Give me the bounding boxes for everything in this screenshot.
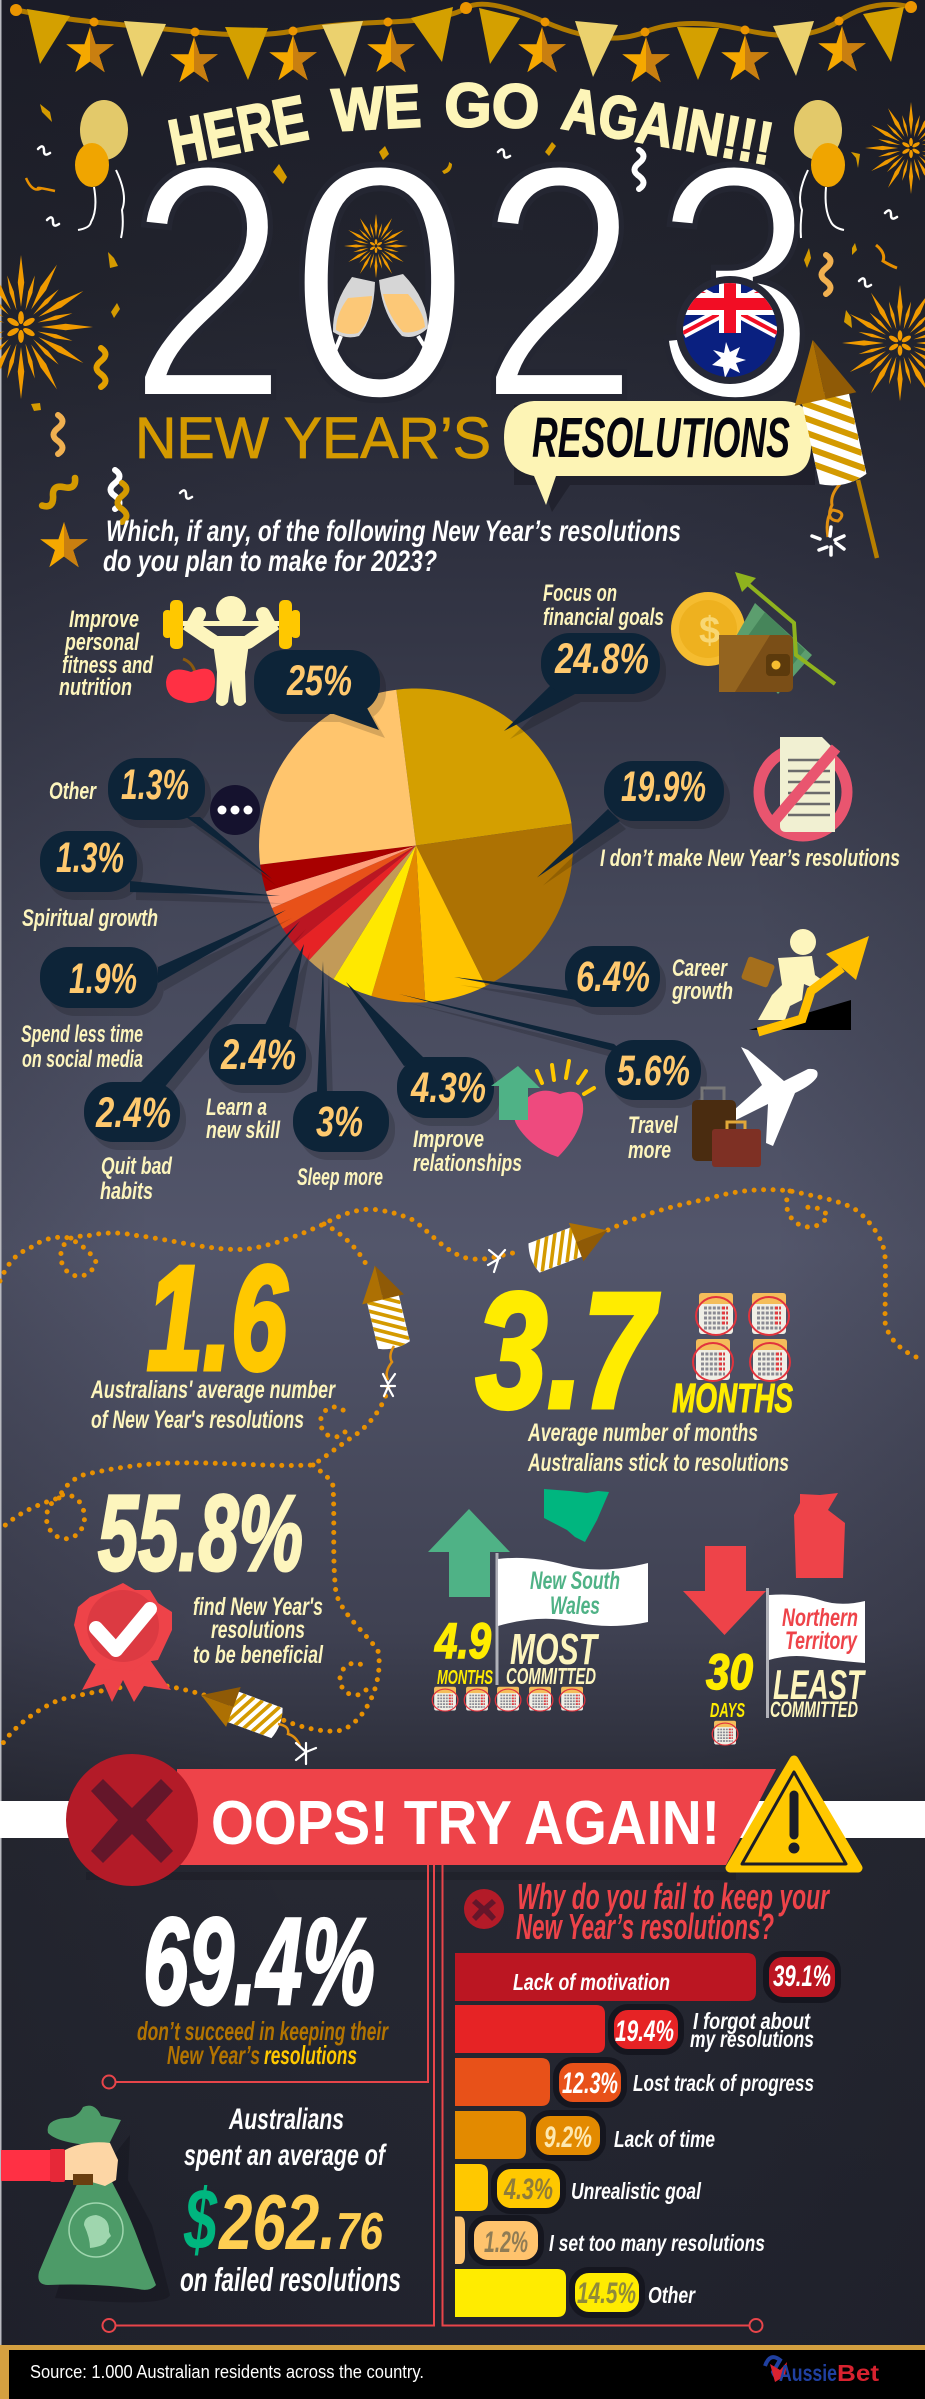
headline: here we go again: AGAIN!!! <box>558 75 778 178</box>
stat: 55.8% <box>74 1472 324 1702</box>
callout: 25% fitness: fitness and <box>62 652 154 679</box>
panel: most committed (NSW) <box>428 1489 648 1711</box>
bar: other <box>455 2269 696 2317</box>
stat: 3.7 months <box>476 1259 793 1477</box>
confetti <box>26 104 897 522</box>
string beads <box>10 1 917 36</box>
stat: money spent <box>180 2103 401 2298</box>
stat: 3.7 months: Average number of months <box>527 1419 758 1447</box>
icon: one calendar <box>712 1721 738 1745</box>
icon: fitness figure <box>163 596 300 706</box>
callout: 6.4% career growth: Career <box>672 955 728 982</box>
flag: Wales <box>550 1592 600 1620</box>
stat: 69.4%: 69.4% <box>143 1894 375 2031</box>
subtitle: new year's: NEW YEAR’S <box>135 406 491 471</box>
icon: climbing figure <box>741 929 869 1032</box>
stat: 1.6 <box>90 1236 336 1434</box>
stars <box>66 26 866 82</box>
stat: 1.6: Australians' average number <box>90 1376 336 1404</box>
bunting <box>10 1 917 82</box>
icon: star <box>40 522 88 567</box>
pie chart <box>259 688 573 1002</box>
pennants <box>27 7 904 80</box>
stat: 69.4%: don’t succeed in keeping their <box>137 2016 389 2046</box>
headline: 2023 <box>128 96 815 468</box>
icon: big rocket <box>782 333 877 558</box>
bar: lack of motivation <box>455 1953 838 2001</box>
callout: 2.4% learn a new skill: 2.4% <box>220 1031 296 1079</box>
question heading: do you plan to make for 2023? <box>103 545 437 578</box>
bar: too many: I set too many resolutions <box>549 2230 765 2256</box>
logo: aussiebet: Aussie <box>779 2360 837 2386</box>
callout: 25% fitness: personal <box>64 629 140 656</box>
flag <box>497 1553 648 1685</box>
panel: most committed (NSW): COMMITTED <box>506 1663 596 1689</box>
headline: 2023: 2 <box>128 96 288 468</box>
fireworks <box>0 102 925 401</box>
panel: least committed (NT): DAYS <box>710 1700 745 1722</box>
stat: money spent: spent an average of <box>184 2139 387 2172</box>
callout: 4.3% relationships: relationships <box>413 1150 522 1177</box>
callout: 4.3% relationships: Improve <box>413 1126 484 1153</box>
callout: 2.4% quit bad habits <box>84 921 300 1205</box>
stat: 69.4%: resolutions <box>264 2040 357 2070</box>
callout: 3% sleep more: 3% <box>316 1098 363 1146</box>
bar: unrealistic goal <box>455 2164 701 2211</box>
callout: 2.4% quit bad habits: habits <box>100 1178 153 1205</box>
logo: aussiebet: Bet <box>837 2360 879 2386</box>
callout: 25% fitness: Improve <box>69 606 139 633</box>
stat: 3.7 months: 3.7 <box>476 1259 659 1442</box>
callout: 24.8% finances: Focus on <box>543 580 617 607</box>
icon: dots <box>210 785 260 835</box>
callout: 4.3% relationships: 4.3% <box>410 1064 486 1112</box>
headline: here we go again <box>163 71 778 179</box>
icon: rocket lower <box>194 1675 290 1745</box>
headline: 2023: 3 <box>655 96 815 468</box>
callout: 5.6% travel more <box>399 994 818 1167</box>
callout: 3% sleep more: Sleep more <box>297 1164 383 1191</box>
footer: Source: 1.000 Australian residents across the country. <box>30 2362 424 2382</box>
callout: 24.8% finances <box>504 572 835 731</box>
flag: New South <box>530 1567 620 1595</box>
callout: 5.6% travel more: 5.6% <box>617 1047 690 1095</box>
callout: 4.3% relationships <box>346 982 594 1177</box>
icon: australian flag <box>676 276 784 384</box>
callout: 2.4% learn a new skill: new skill <box>206 1117 281 1144</box>
flag: Territory <box>785 1627 858 1655</box>
stat: 55.8%: to be beneficial <box>193 1641 324 1669</box>
callout: 2.4% quit bad habits: Quit bad <box>101 1153 173 1180</box>
stat: money spent: $ <box>183 2172 218 2268</box>
bar: forgot: my resolutions <box>690 2026 814 2052</box>
bar: lost track: Lost track of progress <box>633 2070 814 2096</box>
headline: 2023: 2 <box>479 96 639 468</box>
icon: red X circle <box>66 1754 198 1886</box>
icon: coin, wallet and arrow <box>671 572 835 694</box>
icon: NSW map <box>544 1489 609 1542</box>
stat: money spent: Australians <box>228 2103 344 2136</box>
heading: why do you fail <box>464 1876 830 1947</box>
bar: too many <box>455 2216 765 2264</box>
icon: rocket top <box>521 1211 615 1279</box>
logo: aussiebet <box>765 2357 879 2386</box>
footer <box>0 2345 925 2399</box>
callout: 1.3% other: Other <box>49 778 97 805</box>
bar: lack of time <box>455 2111 715 2159</box>
bracket lines <box>102 1865 762 2332</box>
bar: other: 14.5% <box>577 2277 636 2310</box>
headline: here we go again: HERE <box>163 82 313 179</box>
bar: unrealistic goal: 4.3% <box>503 2173 553 2206</box>
heading: why do you fail: New Year’s resolutions? <box>516 1906 774 1947</box>
bar: too many: 1.2% <box>484 2226 528 2259</box>
stat: 55.8%: 55.8% <box>98 1472 303 1593</box>
stat: 69.4%: New Year’s <box>167 2040 260 2070</box>
question heading <box>40 515 681 578</box>
rockets on trails <box>194 1211 615 1764</box>
icon: money bag in hand <box>1 2106 170 2302</box>
flag <box>768 1588 865 1718</box>
panel: least committed (NT): 30 <box>706 1644 753 1700</box>
speech bubble: resolutions <box>504 401 815 512</box>
banner: oops try again: OOPS! TRY AGAIN! <box>211 1789 720 1858</box>
icon: check badge <box>74 1583 172 1702</box>
panel: most committed (NSW): 4.9 <box>434 1613 491 1669</box>
bar: lost track: 12.3% <box>562 2067 618 2100</box>
bar: other: Other <box>648 2282 696 2308</box>
icon: rocket middle <box>354 1261 416 1356</box>
bar: lack of motivation: Lack of motivation <box>513 1969 670 1995</box>
callout: 19.9% no resolutions <box>537 737 900 878</box>
icon: plane and suitcases <box>692 1047 818 1167</box>
icon: small X <box>464 1889 504 1929</box>
icon: small calendars <box>432 1687 585 1711</box>
icon: down arrow <box>683 1546 766 1635</box>
callout: 24.8% finances: 24.8% <box>554 635 649 683</box>
stat: money spent: on failed resolutions <box>180 2261 401 2298</box>
stat: 55.8%: resolutions <box>211 1616 305 1644</box>
panel: least committed (NT): LEAST <box>773 1661 866 1708</box>
stat: 55.8%: find New Year's <box>193 1593 323 1621</box>
headline: here we go again: GO <box>444 71 540 142</box>
callout: 6.4% career growth: 6.4% <box>576 953 650 1001</box>
callout: 25% fitness: 25% <box>286 657 352 705</box>
icon: warning triangle <box>730 1760 858 1868</box>
panel: least committed (NT): COMMITTED <box>770 1697 858 1722</box>
flag: Northern <box>782 1604 858 1632</box>
bar: forgot: 19.4% <box>615 2015 674 2048</box>
stat: 3.7 months: Australians stick to resolutions <box>527 1449 789 1477</box>
stat: 69.4% <box>137 1894 389 2070</box>
callout: 1.9% social media: 1.9% <box>69 955 137 1003</box>
bar: lack of time: Lack of time <box>614 2126 715 2152</box>
question heading: Which, if any, of the following New Year’s resolutions <box>106 515 681 548</box>
callout: 1.3% spiritual growth <box>22 831 280 932</box>
callout: 6.4% career growth: growth <box>671 978 733 1005</box>
callout: 5.6% travel more: Travel <box>628 1112 679 1139</box>
bar: forgot: I forgot about <box>693 2008 811 2034</box>
icon: NT map <box>794 1493 845 1578</box>
stat: 3.7 months: MONTHS <box>672 1375 793 1421</box>
callout: 1.3% other: 1.3% <box>121 761 189 809</box>
bar: unrealistic goal: Unrealistic goal <box>571 2178 701 2204</box>
callout: 1.9% social media: on social media <box>22 1046 143 1073</box>
stat: 1.6: of New Year's resolutions <box>91 1406 304 1434</box>
stat: money spent: 76 <box>336 2203 384 2261</box>
dotted fuse trails <box>0 1190 925 1748</box>
stat: money spent: 262. <box>217 2178 336 2266</box>
callout: 1.3% spiritual growth: Spiritual growth <box>22 905 158 932</box>
panel: least committed (NT) <box>683 1493 866 1745</box>
callout: 1.3% spiritual growth: 1.3% <box>56 834 124 882</box>
callout: 6.4% career growth <box>454 929 869 1032</box>
callout: 25% fitness <box>59 596 380 730</box>
icon: heart and arrow <box>491 1061 594 1157</box>
callout: 1.9% social media <box>21 910 286 1073</box>
callout: 2.4% learn a new skill <box>206 944 306 1144</box>
callout: 2.4% quit bad habits: 2.4% <box>95 1089 171 1137</box>
bar: lack of time: 9.2% <box>544 2121 592 2154</box>
balloons <box>75 100 845 238</box>
callout: 24.8% finances: financial goals <box>543 604 664 631</box>
headline: 2023: 0 <box>289 96 470 468</box>
icon: crossed document <box>759 737 847 836</box>
bar chart <box>455 1953 838 2317</box>
icon: up arrow <box>428 1509 510 1597</box>
bar: lost track <box>455 2058 814 2106</box>
headline: here we go again: WE <box>330 72 423 144</box>
panel: most committed (NSW): MONTHS <box>437 1667 493 1689</box>
callout: 1.9% social media: Spend less time <box>21 1021 143 1048</box>
callout: 5.6% travel more: more <box>628 1137 671 1164</box>
callout: 2.4% learn a new skill: Learn a <box>206 1094 267 1121</box>
callout: 1.3% other <box>49 758 272 879</box>
callout: 25% fitness: nutrition <box>59 674 132 701</box>
bar: forgot <box>455 2005 814 2053</box>
icon: champagne glasses <box>329 214 433 366</box>
callout: 3% sleep more <box>293 961 389 1191</box>
icon: coin, wallet and arrow: $ <box>699 610 720 652</box>
callout: 19.9% no resolutions: 19.9% <box>621 763 706 811</box>
panel: most committed (NSW): MOST <box>510 1625 599 1674</box>
bar: lack of motivation: 39.1% <box>773 1960 831 1993</box>
icon: calendars <box>693 1293 790 1381</box>
stat: 1.6: 1.6 <box>147 1236 288 1401</box>
banner: oops try again <box>0 1754 925 1886</box>
